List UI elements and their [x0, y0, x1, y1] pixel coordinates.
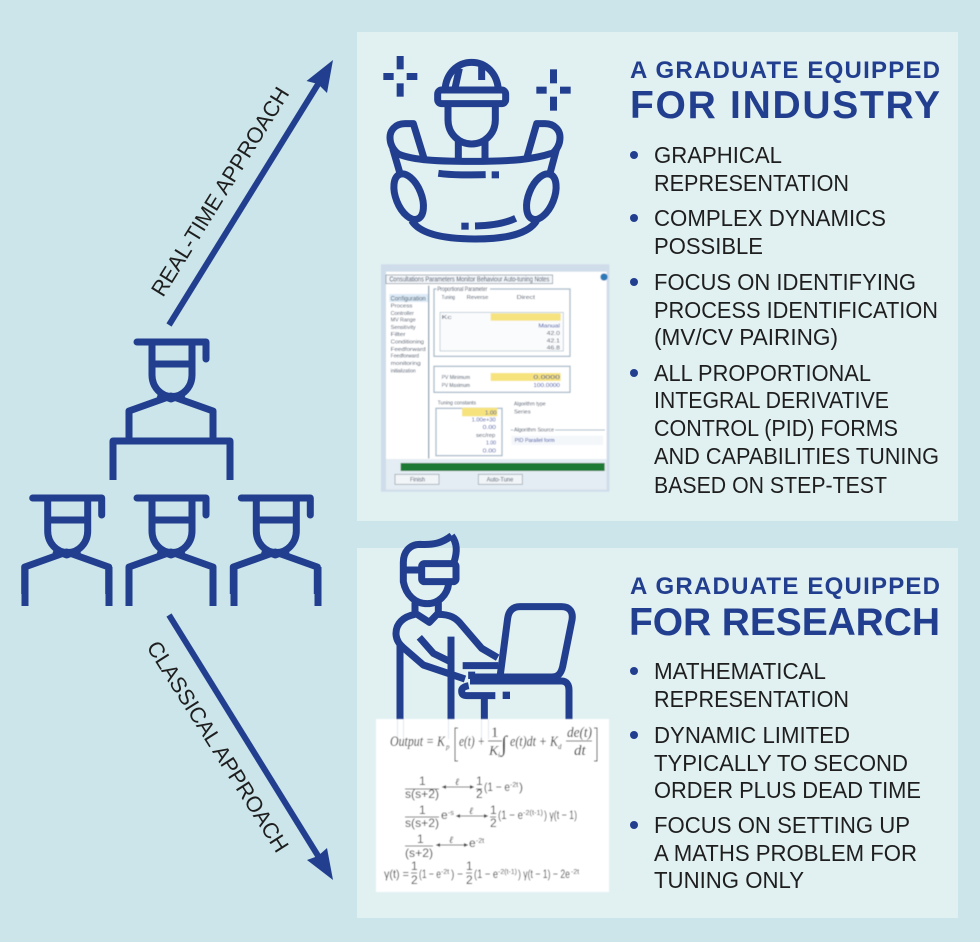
- bullet list: research: REPRESENTATION: [654, 686, 849, 712]
- icon: graduates hierarchy: [25, 342, 318, 606]
- bullet list: industry: REPRESENTATION: [654, 170, 849, 196]
- formula: transforms: 1: [419, 803, 426, 817]
- icon: researcher at laptop: [396, 536, 572, 720]
- formula: PID output: p: [445, 743, 450, 751]
- formula: transforms: 1: [476, 774, 483, 788]
- heading: industry: A GRADUATE EQUIPPED: [630, 57, 940, 84]
- bullet list: industry: FOCUS ON IDENTIFYING: [654, 269, 916, 295]
- formula: transforms: (1 − e: [474, 867, 498, 881]
- bullet list: research: [630, 658, 921, 893]
- bullet list: industry: POSSIBLE: [654, 233, 763, 259]
- formula: transforms: s(s+2): [405, 816, 439, 830]
- panel: industry: [357, 32, 958, 521]
- heading: research: [629, 573, 940, 644]
- bullet list: industry: PROCESS IDENTIFICATION: [654, 297, 938, 323]
- screenshot: software tuning window: Sensitivity: [391, 325, 416, 331]
- screenshot: software tuning window: PID Parallel form: [515, 438, 555, 444]
- bullet list: industry: [630, 142, 939, 498]
- screenshot: software tuning window: Consultations Parameters Monitor Behaviour Auto-tuning Notes: [389, 277, 550, 284]
- screenshot: software tuning window: Manual: [538, 324, 560, 330]
- bullet list: industry: ALL PROPORTIONAL: [654, 360, 871, 386]
- bullet list: research: ORDER PLUS DEAD TIME: [654, 777, 921, 803]
- formula: PID output: Output = K: [390, 734, 446, 750]
- screenshot: software tuning window: Kc: [442, 315, 452, 321]
- formula: transforms: [384, 774, 579, 887]
- screenshot: software tuning window: 1.00: [486, 440, 496, 446]
- screenshot: software tuning window: sec/rep: [476, 433, 495, 439]
- formula: transforms: -2t: [476, 838, 484, 845]
- formula: transforms: (1 − e: [498, 808, 523, 822]
- screenshot: software tuning window: Feedforward: [391, 347, 426, 353]
- screenshot: software tuning window: 42.1: [547, 338, 560, 344]
- bullet list: industry: AND CAPABILITIES TUNING: [654, 443, 939, 469]
- screenshot: software tuning window: 46.8: [547, 346, 560, 352]
- screenshot: software tuning window: 0.00: [483, 425, 496, 431]
- formula: transforms: ℓ: [469, 806, 473, 817]
- formula: transforms: -2(t-1): [498, 869, 517, 876]
- screenshot: software tuning window: Series: [514, 410, 531, 416]
- screenshot: software tuning window: 100.0000: [533, 383, 560, 389]
- heading: industry: [630, 57, 940, 127]
- screenshot: software tuning window: PV Maximum: [442, 383, 470, 389]
- formula: PID output: de(t): [567, 725, 592, 741]
- screenshot: software tuning window: Reverse: [467, 295, 488, 301]
- screenshot: software tuning window: Configuration: [391, 297, 426, 303]
- bullet list: research: MATHEMATICAL: [654, 658, 826, 684]
- formula: PID output: i: [498, 751, 500, 759]
- arrow: classical approach: [169, 615, 333, 880]
- screenshot: software tuning window: Process: [391, 304, 413, 310]
- screenshot: software tuning window: Proportional Parameter: [437, 287, 487, 293]
- screenshot: software tuning window: Direct: [517, 295, 536, 301]
- bullet list: industry: CONTROL (PID) FORMS: [654, 415, 898, 441]
- bullet list: industry: COMPLEX DYNAMICS: [654, 205, 886, 231]
- formula: transforms: s(s+2): [405, 787, 439, 801]
- screenshot: software tuning window: PV Minimum: [442, 375, 470, 381]
- formula panel: [376, 719, 609, 892]
- bullet list: research: TUNING ONLY: [654, 867, 804, 893]
- bullet list: industry: GRAPHICAL: [654, 142, 782, 168]
- bullet list: research: A MATHS PROBLEM FOR: [654, 840, 917, 866]
- formula: transforms: -2t: [571, 869, 579, 876]
- formula: transforms: 1: [490, 803, 497, 817]
- formula: transforms: ): [519, 780, 523, 794]
- label: real-time approach: REAL-TIME APPROACH: [146, 83, 294, 301]
- formula: transforms: e: [441, 808, 448, 822]
- panel: research: [357, 548, 958, 918]
- screenshot: software tuning window: monitoring: [391, 361, 421, 367]
- formula: transforms: (1 − e: [484, 780, 510, 794]
- formula: transforms: ℓ: [455, 777, 459, 788]
- bullet list: industry: INTEGRAL DERIVATIVE: [654, 387, 889, 413]
- screenshot: software tuning window: 0.00: [483, 448, 496, 454]
- formula: transforms: -s: [448, 810, 454, 817]
- formula: PID output: [390, 725, 597, 761]
- bullet list: research: FOCUS ON SETTING UP: [654, 812, 910, 838]
- formula: transforms: 1: [466, 859, 473, 873]
- heading: research: FOR RESEARCH: [629, 601, 940, 644]
- formula: transforms: 1: [411, 859, 418, 873]
- screenshot: software tuning window: initialization: [391, 368, 416, 374]
- screenshot: software tuning window: Algorithm type: [514, 402, 546, 408]
- screenshot: software tuning window: Conditioning: [391, 339, 424, 345]
- heading: industry: FOR INDUSTRY: [630, 84, 940, 127]
- formula: PID output: e(t) +: [459, 734, 485, 750]
- screenshot: software tuning window: Controller: [391, 311, 414, 317]
- bullet list: research: TYPICALLY TO SECOND: [654, 750, 908, 776]
- screenshot: software tuning window: Feedforward: [391, 354, 419, 360]
- screenshot: software tuning window: Algorithm Source: [514, 428, 554, 434]
- formula: PID output: e(t)dt + K: [510, 734, 559, 750]
- screenshot: software tuning window: 0.0000: [533, 375, 560, 381]
- formula: transforms: ) −: [451, 867, 463, 881]
- screenshot: software tuning window: 42.0: [547, 331, 560, 337]
- screenshot: software tuning window: MV Range: [391, 318, 416, 324]
- formula: transforms: 1: [419, 774, 426, 788]
- arrow: real-time approach: [169, 60, 333, 325]
- bullet list: research: DYNAMIC LIMITED: [654, 722, 850, 748]
- screenshot: software tuning window: Auto-Tune: [487, 478, 514, 484]
- formula: transforms: -2(t-1): [523, 810, 543, 817]
- heading: research: A GRADUATE EQUIPPED: [630, 573, 940, 600]
- formula: transforms: 2: [476, 787, 483, 801]
- formula: transforms: (1 − e: [419, 867, 441, 881]
- formula: transforms: -2t: [510, 782, 518, 789]
- label: classical approach: CLASSICAL APPROACH: [142, 636, 294, 857]
- formula: transforms: 2: [490, 816, 497, 830]
- bullet list: industry: (MV/CV PAIRING): [654, 324, 838, 350]
- screenshot: software tuning window: Tuning: [442, 295, 455, 301]
- screenshot: software tuning window: 1.00e+30: [472, 418, 496, 424]
- bullet list: industry: BASED ON STEP-TEST: [654, 472, 887, 498]
- formula: transforms: γ(t) =: [384, 867, 409, 881]
- formula: transforms: 2: [411, 873, 418, 887]
- screenshot: software tuning window: Tuning constants: [438, 400, 476, 406]
- screenshot: software tuning window: 1.00: [485, 410, 497, 416]
- formula: transforms: ) γ(t − 1) − 2e: [518, 867, 570, 881]
- formula: PID output: dt: [574, 743, 586, 759]
- formula: transforms: 2: [466, 873, 473, 887]
- formula: transforms: e: [469, 836, 476, 850]
- formula: PID output: ∫: [499, 731, 509, 757]
- screenshot: software tuning window: [381, 264, 609, 492]
- formula: transforms: ℓ: [449, 835, 453, 846]
- screenshot: software tuning window: Filter: [391, 332, 406, 338]
- icon: engineer with blueprint: [383, 56, 571, 239]
- formula: transforms: (s+2): [405, 846, 433, 860]
- formula: transforms: -2t: [441, 869, 449, 876]
- screenshot: software tuning window: Finish: [410, 478, 425, 484]
- formula: transforms: 1: [417, 832, 424, 846]
- formula: PID output: K: [488, 744, 499, 759]
- formula: transforms: ) γ(t − 1): [544, 808, 577, 822]
- formula: PID output: 1: [491, 725, 498, 741]
- formula: PID output: d: [558, 743, 562, 751]
